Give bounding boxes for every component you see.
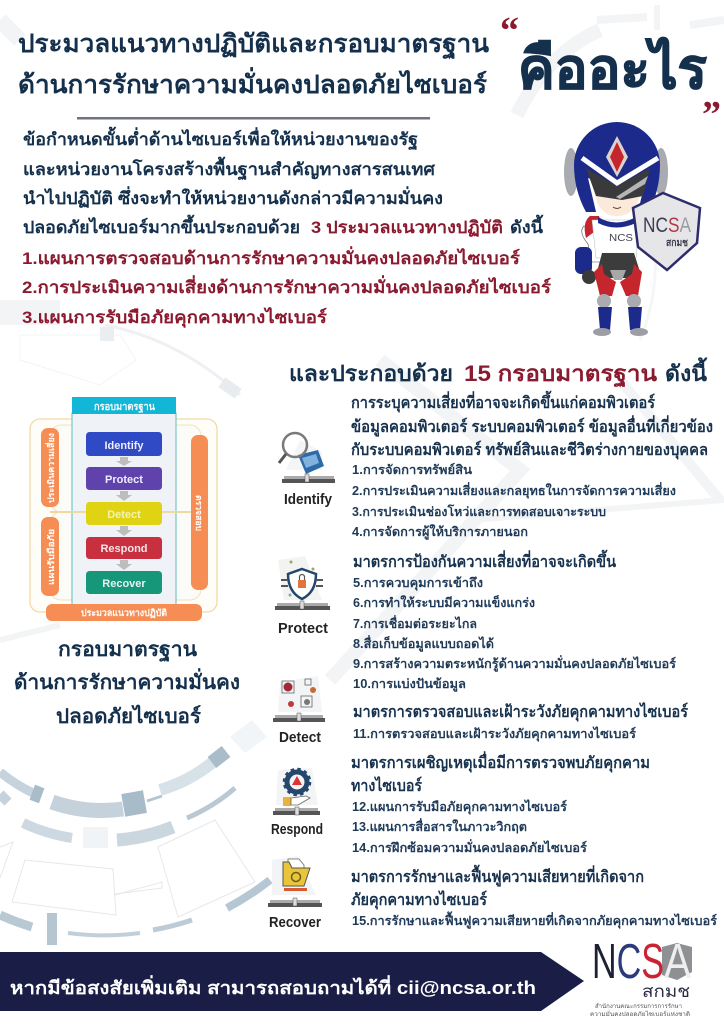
icon: Protect (275, 556, 330, 637)
step: Recover: Recover (102, 578, 146, 590)
step: Detect (86, 502, 162, 525)
list: three codes of practice: 3.แผนการรับมือภัยคุกคามทางไซเบอร์ (22, 307, 328, 328)
block: Identify text: 4.การจัดการผู้ให้บริการภายนอก (352, 524, 528, 540)
block: Recover text (351, 864, 717, 929)
list: three codes of practice (22, 246, 552, 328)
block: Detect text (353, 702, 688, 742)
step: Respond (86, 537, 162, 559)
icon: Detect: Detect (279, 730, 321, 746)
right audit bar (191, 435, 208, 590)
block: Protect text: 5.การควบคุมการเข้าถึง (353, 576, 483, 591)
step: Protect (86, 467, 162, 490)
right audit bar: ตรวจสอบ (194, 495, 204, 531)
heading: what is it: “ (500, 10, 519, 52)
intro paragraph (23, 126, 543, 237)
heading: what is it: ” (702, 94, 721, 136)
bottom code bar: ประมวลแนวทางปฏิบัติ (81, 607, 167, 619)
icon: Protect: Protect (278, 621, 328, 637)
block: Protect text: 10.การแบ่งปันข้อมูล (353, 677, 466, 692)
bottom code bar (46, 604, 202, 621)
heading: what is it (500, 10, 721, 136)
block: Respond text: 13.แผนการสื่อสารในภาวะวิกฤต (352, 818, 527, 834)
block: Recover text: ภัยคุกคามทางไซเบอร์ (351, 890, 487, 910)
step: Recover (86, 571, 162, 594)
mascot (564, 122, 700, 336)
intro paragraph: ปลอดภัยไซเบอร์มากขึ้นประกอบด้วย (23, 214, 300, 237)
heading: 15 frameworks (289, 357, 708, 388)
block: Respond text (351, 751, 650, 855)
intro paragraph: ดังนี้ (510, 214, 543, 237)
block: Respond text: 14.การฝึกซ้อมความมั่นคงปลอดภัยไซเบอร์ (352, 839, 587, 855)
mascot: NCSA (643, 214, 691, 237)
intro paragraph: 3 ประมวลแนวทางปฏิบัติ (311, 218, 503, 237)
list: three codes of practice: 1.แผนการตรวจสอบด้านการรักษาความมั่นคงปลอดภัยไซเบอร์ (22, 246, 521, 268)
framework diagram (30, 397, 217, 621)
intro paragraph: นำไปปฏิบัติ ซึ่งจะทำให้หน่วยงานดังกล่าวมีความมั่นคง (23, 186, 443, 208)
NCSA logo: ความมั่นคงปลอดภัยไซเบอร์แห่งชาติ (590, 1010, 690, 1018)
block: Protect text: 6.การทำให้ระบบมีความแข็งแกร่ง (353, 595, 535, 610)
diagram caption (14, 639, 240, 728)
block: Identify text: การระบุความเสี่ยงที่อาจจะเกิดขึ้นแก่คอมพิวเตอร์ (351, 390, 655, 413)
block: Identify text: 3.การประเมินช่องโหว่และการทดสอบเจาะระบบ (352, 504, 606, 519)
list: three codes of practice: 2.การประเมินความเสี่ยงด้านการรักษาความมั่นคงปลอดภัยไซเบอร์ (22, 275, 552, 297)
heading: what is it: คืออะไร (518, 36, 707, 100)
block: Protect text: 9.การสร้างความตระหนักรู้ด้านความมั่นคงปลอดภัยไซเบอร์ (353, 655, 676, 672)
block: Respond text: มาตรการเผชิญเหตุเมื่อมีการตรวจพบภัยคุกคาม (351, 751, 650, 773)
NCSA logo: A (664, 935, 691, 989)
block: Respond text: ทางไซเบอร์ (351, 776, 422, 795)
title (18, 30, 489, 99)
heading: 15 frameworks: และประกอบด้วย (289, 361, 453, 386)
framework column: กรอบมาตรฐาน (94, 402, 155, 413)
block: Detect text: 11.การตรวจสอบและเฝ้าระวังภัยคุกคามทางไซเบอร์ (353, 726, 636, 742)
NCSA logo: สำนักงานคณะกรรมการการรักษา (595, 1003, 682, 1010)
block: Protect text: มาตรการป้องกันความเสี่ยงที่อาจจะเกิดขึ้น (353, 549, 616, 571)
block: Recover text: มาตรการรักษาและฟื้นฟูความเสียหายที่เกิดจาก (351, 864, 644, 888)
diagram caption: ด้านการรักษาความมั่นคง (14, 667, 240, 694)
block: Identify text: 1.การจัดการทรัพย์สิน (352, 462, 472, 477)
icon: Respond (271, 768, 323, 838)
icon: Identify: Identify (284, 492, 332, 508)
block: Recover text: 15.การรักษาและฟื้นฟูความเสียหายที่เกิดจากภัยคุกคามทางไซเบอร์ (352, 911, 717, 929)
block: Protect text (353, 549, 676, 692)
framework column (72, 397, 176, 605)
left audit bars (41, 428, 59, 596)
block: Protect text: 8.สื่อเก็บข้อมูลแบบถอดได้ (353, 635, 494, 652)
block: Identify text: 2.การประเมินความเสี่ยงและกลยุทธในการจัดการความเสี่ยง (352, 482, 676, 499)
flow arrows (116, 457, 132, 570)
contact banner: หากมีข้อสงสัยเพิ่มเติม สามารถสอบถามได้ที่ cii@ncsa.or.th (10, 975, 536, 998)
left audit bars: ประเมินความเสี่ยง (44, 433, 56, 503)
step: Protect: Protect (105, 474, 143, 486)
icon: Recover: Recover (269, 915, 321, 931)
NCSA logo: NCS (592, 935, 664, 989)
block: Protect text: 7.การเชื่อมต่อระยะไกล (353, 615, 477, 631)
step: Detect: Detect (107, 509, 141, 521)
heading: 15 frameworks: ดังนี้ (665, 357, 708, 386)
icon: Detect (273, 676, 325, 746)
block: Respond text: 12.แผนการรับมือภัยคุกคามทางไซเบอร์ (352, 799, 567, 815)
heading: 15 frameworks: 15 กรอบมาตรฐาน (464, 361, 657, 388)
diagram caption: ปลอดภัยไซเบอร์ (56, 704, 201, 728)
NCSA logo (590, 935, 692, 1018)
intro paragraph: และหน่วยงานโครงสร้างพื้นฐานสำคัญทางสารสนเทศ (23, 156, 436, 181)
intro paragraph: ข้อกำหนดขั้นต่ำด้านไซเบอร์เพื่อให้หน่วยงานของรัฐ (23, 126, 418, 151)
title: ประมวลแนวทางปฏิบัติและกรอบมาตรฐาน (18, 30, 489, 60)
left audit bars: แผนรับมือภัย (46, 529, 56, 585)
icon: Recover (268, 856, 322, 931)
contact banner (0, 952, 584, 1011)
step: Identify: Identify (104, 440, 144, 452)
mascot: สกมช (666, 238, 688, 249)
block: Detect text: มาตรการตรวจสอบและเฝ้าระวังภัยคุกคามทางไซเบอร์ (353, 702, 688, 722)
block: Identify text (351, 390, 713, 540)
step: Respond: Respond (100, 543, 148, 555)
mascot: NCS (609, 233, 633, 244)
icon: Respond: Respond (271, 822, 323, 838)
title: ด้านการรักษาความมั่นคงปลอดภัยไซเบอร์ (18, 67, 488, 99)
step: Identify (86, 432, 162, 456)
NCSA logo: สกมช (642, 982, 690, 1001)
diagram caption: กรอบมาตรฐาน (58, 639, 197, 663)
icon: Identify (279, 433, 335, 508)
